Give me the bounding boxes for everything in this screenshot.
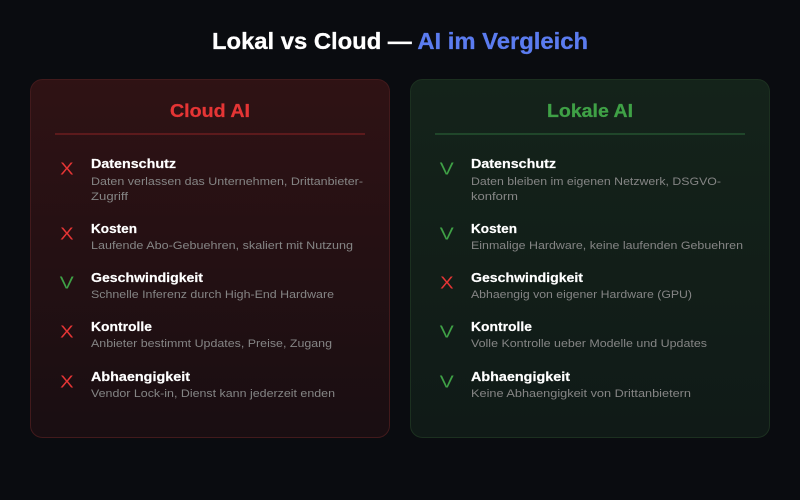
icon: check: V (440, 321, 454, 341)
row: Geschwindigkeit: Geschwindigkeit (471, 270, 584, 285)
row: Kosten (440, 221, 743, 252)
icon: check: V (440, 371, 454, 391)
row: Datenschutz (440, 156, 721, 203)
row: Kosten: Kosten (91, 221, 137, 236)
heading rule (55, 133, 365, 135)
row: Geschwindigkeit (440, 270, 692, 301)
icon: cross: X (60, 223, 74, 243)
row: Datenschutz: konform (471, 191, 518, 203)
icon: cross: X (60, 371, 74, 391)
row: Abhaengigkeit: Keine Abhaengigkeit von Drittanbietern (471, 388, 691, 400)
row: Geschwindigkeit: Abhaengig von eigener Hardware (GPU) (471, 289, 692, 301)
row: Kosten: Laufende Abo-Gebuehren, skaliert mit Nutzung (91, 240, 353, 252)
title: Lokal vs Cloud — AI im Vergleich (212, 28, 588, 54)
row: Geschwindigkeit: Schnelle Inferenz durch High-End Hardware (91, 289, 334, 301)
row: Kontrolle: Kontrolle (91, 319, 152, 334)
panel background: Cloud AI (30, 80, 390, 438)
icon: cross: X (440, 272, 454, 292)
row: Kontrolle: Volle Kontrolle ueber Modelle und Updates (471, 338, 708, 350)
row: Geschwindigkeit: Geschwindigkeit (91, 270, 204, 285)
row: Datenschutz: Daten verlassen das Unternehmen, Drittanbieter- (91, 176, 363, 188)
row: Kontrolle: Anbieter bestimmt Updates, Preise, Zugang (91, 338, 332, 350)
row: Kontrolle: Kontrolle (471, 319, 532, 334)
row: Kosten (60, 221, 353, 252)
row: Kontrolle (440, 319, 708, 350)
heading rule (435, 133, 745, 135)
icon: cross: X (60, 158, 74, 178)
icon: check: V (440, 158, 454, 178)
row: Abhaengigkeit: Abhaengigkeit (471, 369, 571, 384)
row: Abhaengigkeit: Abhaengigkeit (91, 369, 191, 384)
row: Datenschutz: Zugriff (91, 191, 129, 203)
row: Kontrolle (60, 319, 332, 350)
row: Geschwindigkeit (60, 270, 334, 301)
row: Kosten: Einmalige Hardware, keine laufenden Gebuehren (471, 240, 743, 252)
panel: Lokale AI (410, 80, 770, 438)
row: Abhaengigkeit (60, 369, 335, 400)
icon: check: V (440, 223, 454, 243)
row: Datenschutz (60, 156, 363, 203)
row: Kosten: Kosten (471, 221, 517, 236)
row: Abhaengigkeit: Vendor Lock-in, Dienst kann jederzeit enden (91, 388, 335, 400)
panel background: Lokale AI (410, 80, 770, 438)
row: Datenschutz: Datenschutz (471, 156, 557, 171)
row: Abhaengigkeit (440, 369, 691, 400)
icon: check: V (60, 272, 74, 292)
heading: Lokale AI: Lokale AI (547, 101, 633, 121)
row: Datenschutz: Daten bleiben im eigenen Netzwerk, DSGVO- (471, 176, 721, 188)
panel: Cloud AI (30, 80, 390, 438)
icon: cross: X (60, 321, 74, 341)
row: Datenschutz: Datenschutz (91, 156, 177, 171)
heading: Cloud AI: Cloud AI (170, 101, 250, 121)
